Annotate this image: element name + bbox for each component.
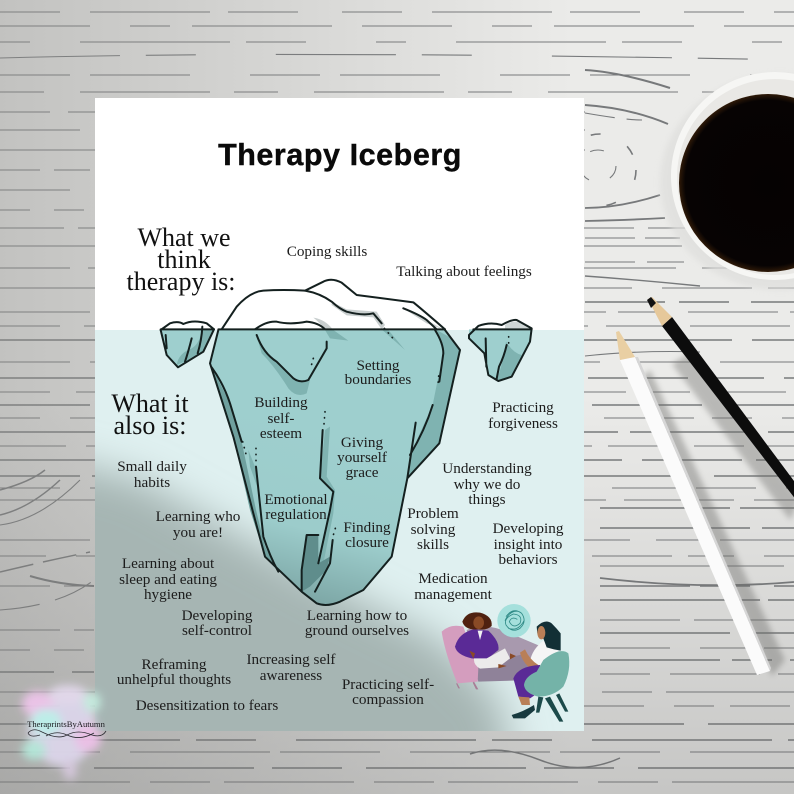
labels to the left and below the iceberg: Reframing	[142, 656, 207, 673]
labels on the iceberg	[254, 357, 411, 551]
labels to the right of the iceberg: Medication	[418, 570, 488, 587]
labels to the left and below the iceberg: you are!	[173, 524, 223, 541]
labels on the iceberg: regulation	[265, 506, 327, 523]
title: Therapy Iceberg	[218, 138, 462, 172]
illustration: therapy session	[442, 604, 569, 722]
labels to the left and below the iceberg: Increasing self	[247, 651, 336, 668]
labels to the left and below the iceberg: sleep and eating	[119, 571, 217, 588]
thought bubble	[497, 604, 531, 637]
labels on the iceberg: Building	[254, 394, 308, 411]
labels to the left and below the iceberg	[117, 458, 434, 714]
labels on the iceberg: Setting	[356, 357, 400, 374]
labels on the iceberg: boundaries	[345, 371, 411, 388]
labels to the right of the iceberg: behaviors	[498, 551, 558, 568]
labels to the left and below the iceberg: unhelpful thoughts	[117, 671, 231, 688]
labels to the left and below the iceberg: Desensitization to fears	[136, 697, 278, 714]
labels to the left and below the iceberg: hygiene	[144, 586, 192, 603]
labels to the right of the iceberg: forgiveness	[488, 415, 558, 432]
heading: what it also is: What it	[111, 389, 189, 418]
labels to the left and below the iceberg: Developing	[182, 607, 253, 624]
client in purple	[455, 612, 516, 669]
labels to the right of the iceberg: solving	[411, 521, 456, 538]
labels to the left and below the iceberg: Learning who	[156, 508, 241, 525]
labels above water	[287, 243, 532, 280]
labels to the left and below the iceberg: self-control	[182, 622, 252, 639]
heading: what we think therapy is	[126, 223, 236, 296]
heading: what we think therapy is: therapy is:	[126, 267, 236, 296]
labels above water: Coping skills	[287, 243, 367, 260]
labels on the iceberg: esteem	[260, 425, 302, 442]
ice shading	[210, 330, 460, 592]
labels on the iceberg: self-	[268, 410, 294, 427]
icon: white pencil	[616, 331, 785, 676]
labels to the right of the iceberg: why we do	[454, 476, 521, 493]
labels to the right of the iceberg	[407, 399, 564, 603]
labels to the left and below the iceberg: compassion	[352, 691, 424, 708]
logo: TheraprintsByAutumn watercolor mark: TheraprintsByAutumn	[27, 719, 106, 729]
panel: iceberg poster	[95, 98, 584, 731]
labels on the iceberg: Finding	[343, 519, 391, 536]
teal armchair	[524, 651, 569, 722]
labels to the right of the iceberg: skills	[417, 536, 449, 553]
heading: what we think therapy is: think	[157, 245, 211, 274]
labels above water: Talking about feelings	[396, 263, 532, 280]
labels on the iceberg: yourself	[337, 449, 388, 466]
icon: coffee cup	[660, 72, 794, 290]
labels on the iceberg: Emotional	[264, 491, 328, 508]
labels to the right of the iceberg: Practicing	[492, 399, 554, 416]
labels to the left and below the iceberg: ground ourselves	[305, 622, 409, 639]
labels to the left and below the iceberg: Learning how to	[307, 607, 408, 624]
heading: what it also is	[111, 389, 189, 440]
heading: what it also is: also is:	[114, 411, 186, 440]
labels to the right of the iceberg: insight into	[494, 536, 563, 553]
icon: black pencil	[647, 297, 794, 520]
labels on the iceberg: closure	[345, 534, 389, 551]
labels to the right of the iceberg: Understanding	[442, 460, 532, 477]
sofa	[442, 626, 540, 689]
heading: what we think therapy is: What we	[137, 223, 231, 252]
labels to the left and below the iceberg: Small daily	[117, 458, 187, 475]
labels on the iceberg: Giving	[341, 434, 383, 451]
labels to the right of the iceberg: management	[414, 586, 493, 603]
labels to the left and below the iceberg: awareness	[260, 667, 322, 684]
labels to the left and below the iceberg: Practicing self-	[342, 676, 434, 693]
labels to the right of the iceberg: things	[468, 491, 506, 508]
small iceberg right	[469, 320, 532, 381]
labels to the right of the iceberg: Problem	[407, 505, 459, 522]
labels to the right of the iceberg: Developing	[493, 520, 564, 537]
logo: TheraprintsByAutumn watercolor mark	[22, 685, 106, 780]
labels to the left and below the iceberg: Learning about	[122, 555, 215, 572]
small iceberg left	[161, 321, 214, 367]
therapist	[512, 621, 561, 718]
labels on the iceberg: grace	[346, 464, 379, 481]
iceberg tip above water	[218, 280, 445, 329]
iceberg illustration	[161, 280, 532, 605]
labels to the left and below the iceberg: habits	[134, 474, 170, 491]
iceberg body below water	[210, 328, 460, 605]
